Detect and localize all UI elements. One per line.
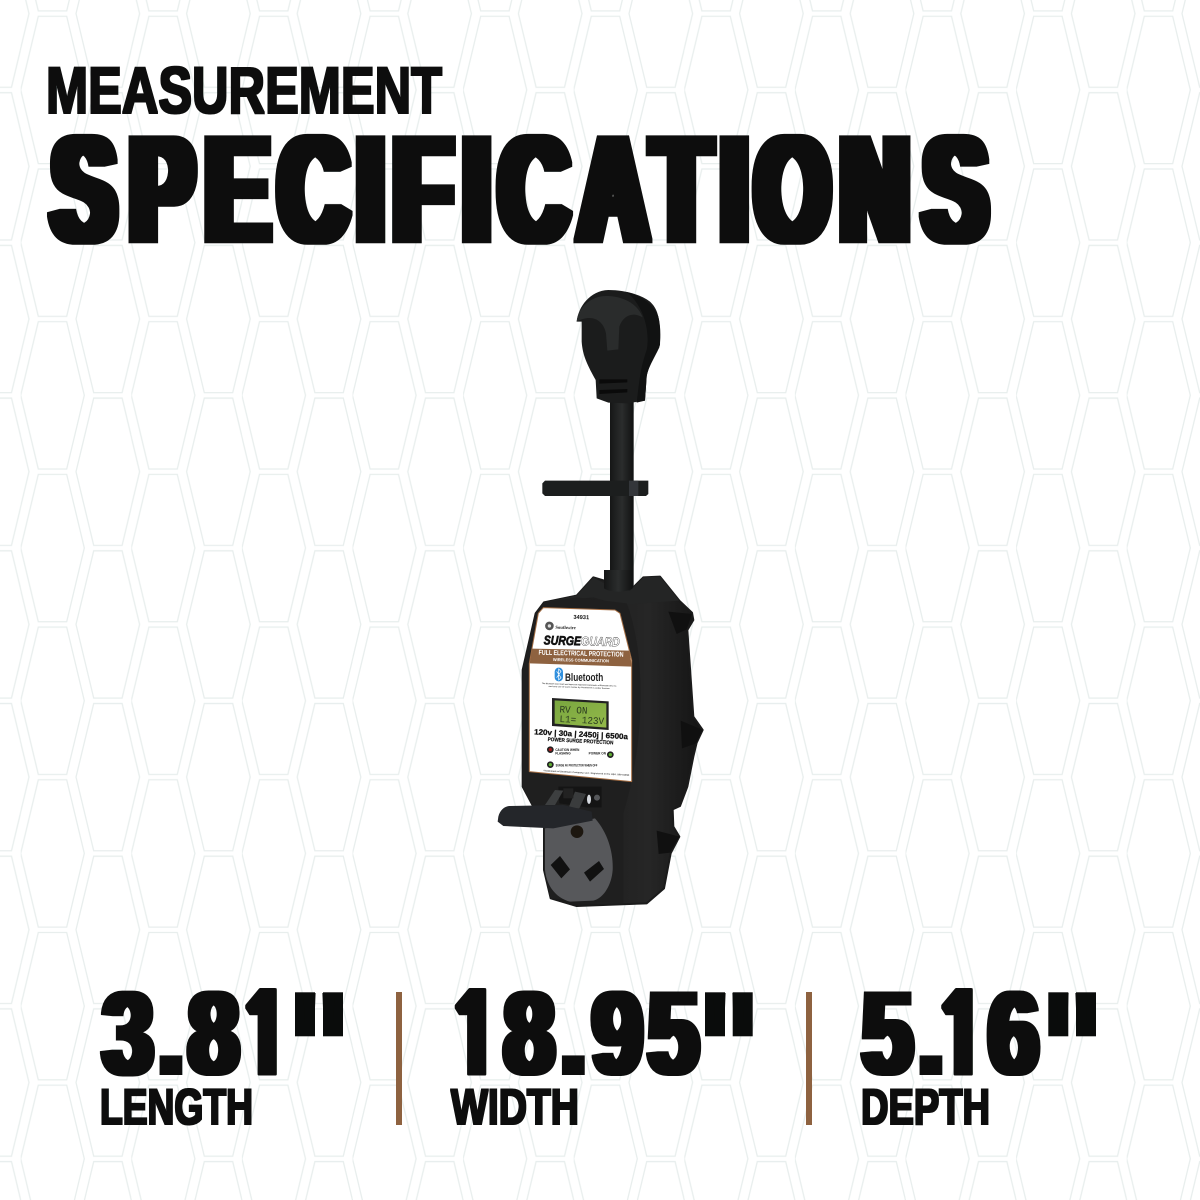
label: DEPTH	[861, 1079, 990, 1135]
hinge	[545, 787, 602, 808]
ratings: 120v | 30a | 2450j | 6500a	[534, 727, 629, 741]
front label: WIRELESS COMMUNICATION	[553, 657, 609, 663]
title line: measurement: MEASUREMENT	[46, 53, 442, 127]
value: "	[1050, 969, 1094, 1100]
lcd screen	[552, 698, 609, 730]
indicator: caution: FLASHING	[555, 751, 571, 755]
front label: and any use of such marks by Southwire is under license.	[548, 685, 611, 690]
indicator: surge	[547, 761, 597, 768]
spec: width	[449, 969, 753, 1135]
surge protector body	[498, 570, 703, 906]
plug head and cord	[542, 290, 660, 597]
indicator: power on: POWER ON	[589, 751, 607, 755]
indicator: caution	[547, 746, 580, 755]
cord strap	[542, 481, 648, 496]
plug body	[577, 290, 660, 403]
front label	[529, 608, 632, 782]
indicator: power on	[589, 751, 614, 758]
front label: POWER SURGE PROTECTION	[548, 737, 614, 746]
spec: depth	[861, 969, 1096, 1135]
value: 3.81	[103, 969, 291, 1100]
label footer: *Trademark of Southwire Company, LLC. Registered in the USA. 580-0136B	[543, 769, 630, 777]
lcd screen: RV ON	[559, 704, 588, 717]
value: 18.95	[449, 969, 699, 1100]
bluetooth logo	[555, 668, 603, 684]
surgeguard logo: SURGE	[544, 633, 582, 648]
spec: length	[100, 969, 343, 1135]
bluetooth logo: Bluetooth	[565, 672, 603, 684]
southwire logo: Southwire	[555, 626, 576, 631]
title line: specifications: SPECIFICATIONS	[52, 105, 987, 274]
label: WIDTH	[451, 1079, 579, 1135]
brown band	[530, 649, 632, 667]
socket flap	[498, 805, 593, 828]
indicator: surge: SURGE AV PROTECTOR WHEN OFF	[556, 763, 597, 767]
value: 5.16	[862, 969, 1039, 1100]
cord	[610, 397, 634, 597]
divider	[806, 992, 812, 1125]
divider	[396, 992, 402, 1125]
housing ribs	[657, 612, 703, 854]
plug grip slots	[599, 379, 627, 394]
surgeguard logo	[544, 633, 620, 649]
band text: FULL ELECTRICAL PROTECTION	[538, 650, 624, 659]
surgeguard logo: GUARD	[581, 634, 620, 649]
value: "	[708, 969, 751, 1100]
cord collar	[604, 570, 633, 592]
socket faceplate	[545, 818, 613, 902]
plug grip cover	[577, 296, 643, 351]
product: surge guard	[498, 290, 703, 906]
title	[46, 53, 987, 274]
label: LENGTH	[100, 1079, 253, 1135]
housing back	[523, 577, 703, 906]
bluetooth small print: The Bluetooth word mark and logos are registered trademarks of Bluetooth SIG, Inc.	[542, 682, 617, 688]
lcd screen: L1= 123V	[559, 714, 604, 727]
model number: 34931	[573, 615, 589, 621]
indicator: caution: CAUTION WHEN	[555, 748, 580, 752]
value: "	[298, 969, 341, 1100]
